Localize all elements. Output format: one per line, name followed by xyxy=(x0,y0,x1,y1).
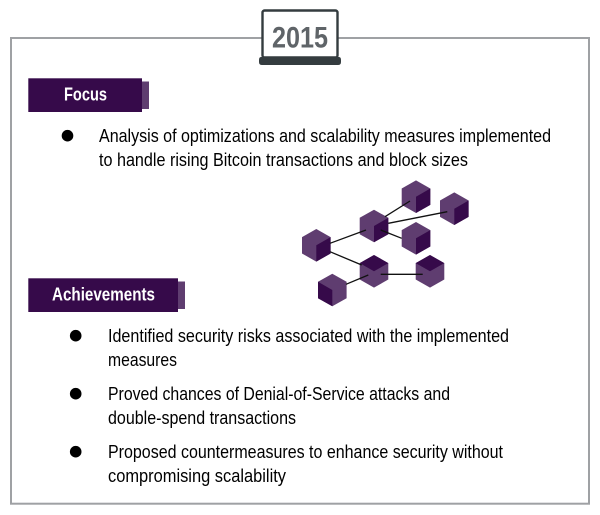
focus bullet text: to handle rising Bitcoin transactions and block sizes xyxy=(99,150,468,170)
focus bullet text: Analysis of optimizations and scalability measures implemented xyxy=(99,126,551,146)
achievement 2: Proved chances of Denial-of-Service attacks and xyxy=(108,384,450,404)
icon: blockchain network of cubes xyxy=(302,180,469,306)
panel: focus heading: Focus xyxy=(64,84,107,104)
achievement 2: double-spend transactions xyxy=(108,408,296,428)
achievement 1 xyxy=(70,326,509,370)
achievement 3: compromising scalability xyxy=(108,466,286,486)
year heading: 2015 xyxy=(272,22,328,54)
panel: achievements heading xyxy=(28,278,185,312)
focus bullet text xyxy=(62,126,551,170)
achievement 2 xyxy=(70,384,450,428)
panel: focus heading xyxy=(28,78,149,112)
achievement 3: Proposed countermeasures to enhance security without xyxy=(108,442,503,462)
achievement 3 xyxy=(70,442,503,486)
panel: achievements heading: Achievements xyxy=(52,284,155,304)
icon: laptop with year xyxy=(259,10,341,65)
achievement 1: measures xyxy=(108,350,177,370)
achievement 1: Identified security risks associated with the implemented xyxy=(108,326,509,346)
